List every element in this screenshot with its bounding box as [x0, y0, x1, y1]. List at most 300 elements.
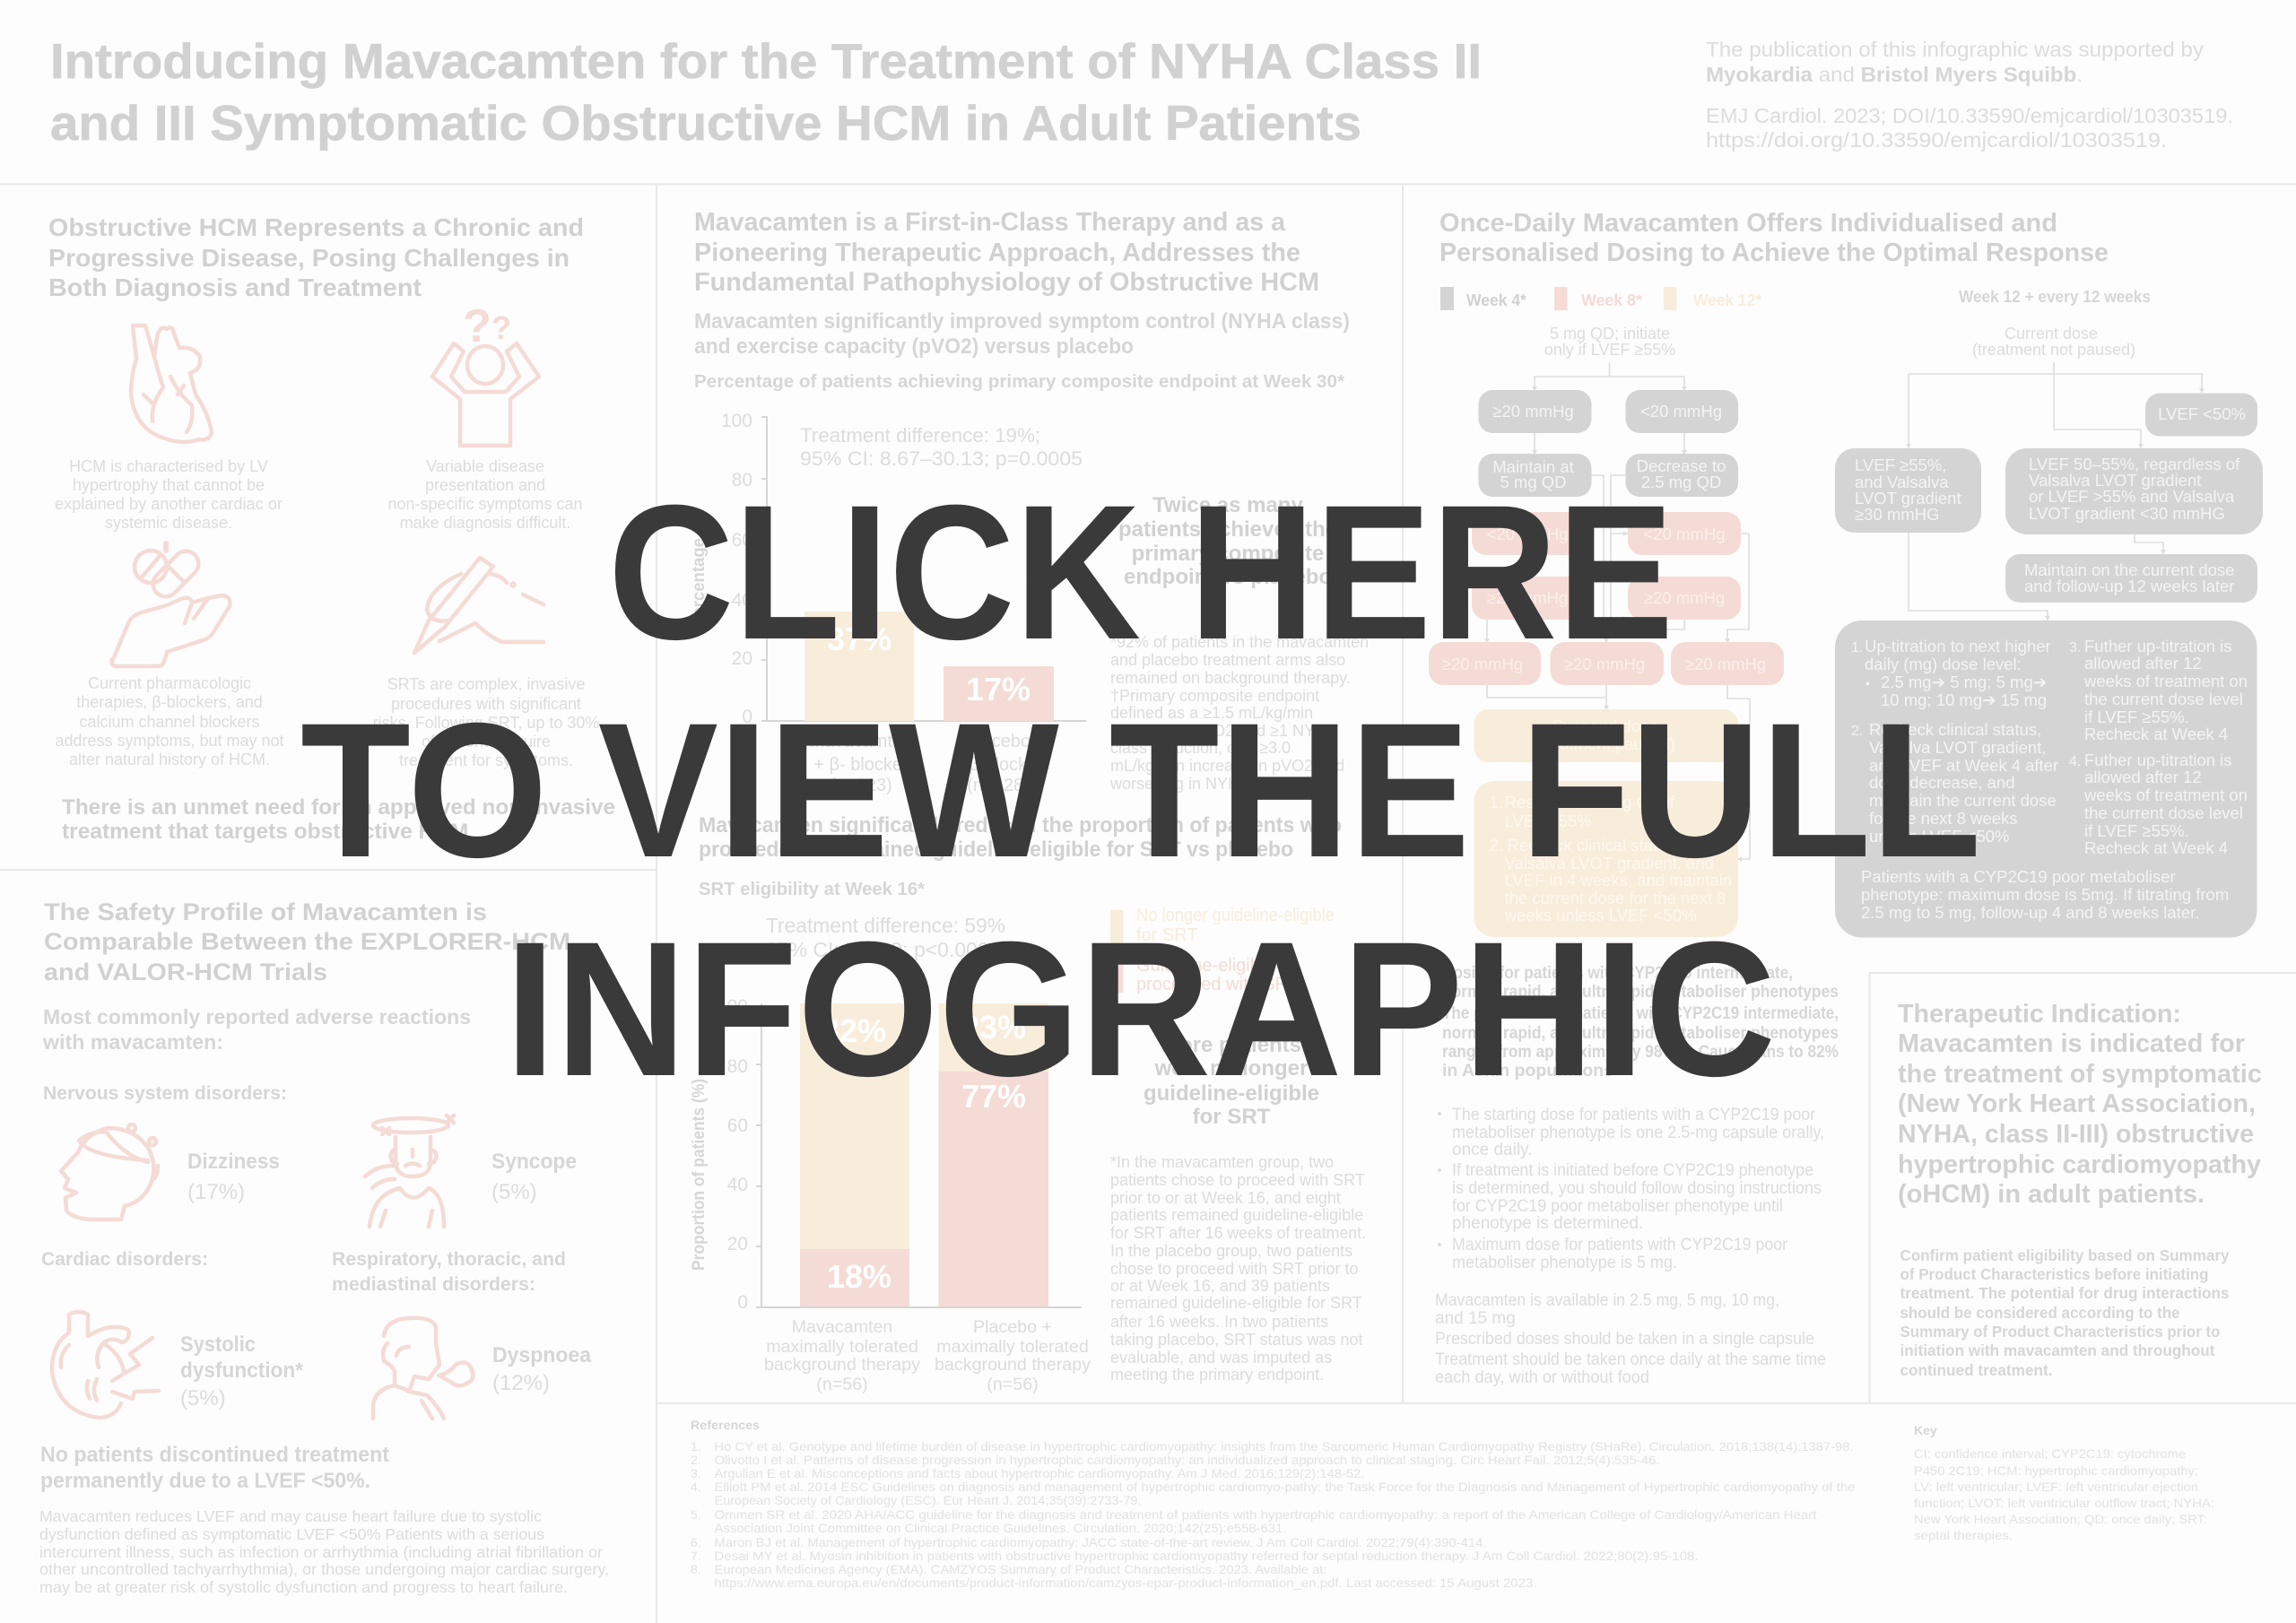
flow: up-titration box: unless LVEF <50%: [1869, 827, 2009, 846]
footnote: SRT: [1110, 1153, 1366, 1384]
callout: no longer eligible: guideline-eligible: [1144, 1081, 1319, 1106]
text: confirm eligibility: initiation with mavacamten and throughout: [1900, 1341, 2215, 1359]
legend: SRT eligibility: proceeded with SRT: [1136, 975, 1299, 994]
bar chart: primary composite endpoint: [690, 411, 1086, 795]
callout: twice as many: Twice as many: [1152, 493, 1303, 517]
callout: twice as many: [1118, 493, 1337, 589]
footnote: SRT: meeting the primary endpoint.: [1110, 1366, 1324, 1384]
bar chart: SRT eligibility: 100: [717, 996, 748, 1017]
flow: up-titration box: 2.5 mg to 5 mg, follow-up 4 and 8 weeks later.: [1861, 903, 2199, 922]
footnote: SRT: *In the mavacamten group, two: [1110, 1153, 1334, 1171]
text: SRTs: risks. Following SRT, up to 30%: [373, 714, 599, 732]
references: European Medicines Agency (EMA). CAMZYOS Summary of Product Characteristics. 2023. Available at:: [714, 1562, 1327, 1576]
bar chart: primary composite endpoint: + β-blocker: [953, 755, 1043, 775]
text: phenotype dosing: normal, rapid, and ultrarapid metaboliser phenotypes: [1442, 982, 1839, 1002]
callout: no longer eligible: were no longer: [1154, 1056, 1308, 1081]
list: poor metaboliser notes: Maximum dose for patients with CYP2C19 poor: [1452, 1236, 1788, 1254]
flow: up-titration box: weeks of treatment on: [2083, 672, 2248, 690]
text: dyspnoea: Dyspnoea: [492, 1343, 592, 1367]
flow: up-titration box: phenotype: maximum dose is 5mg. If titrating from: [1861, 885, 2229, 904]
flow: LVEF 50-55: LVOT gradient <30 mmHG: [2029, 504, 2225, 523]
heading: safety profile: Comparable Between the EXPLORER-HCM: [44, 928, 570, 955]
list: poor metaboliser notes: for CYP2C19 poor metaboliser phenotype until: [1452, 1197, 1783, 1216]
flow: up-titration box: daily (mg) dose level:: [1865, 655, 2022, 673]
panel: individualised dosing: [1429, 209, 2263, 1387]
heading: first-in-class: Pioneering Therapeutic Approach, Addresses the: [694, 239, 1300, 267]
overlay: click here call to action: CLICK HERE: [608, 465, 1674, 680]
list: poor metaboliser notes: If treatment is initiated before CYP2C19 phenotype: [1452, 1161, 1813, 1180]
bar chart: SRT eligibility: 95% CI: 50–69; p<0.0001: [766, 938, 1001, 961]
text: current pharmacologic therapies: address symptoms, but may not: [55, 732, 284, 750]
flow: LVEF 55 and gradient: LVOT gradient: [1855, 489, 1961, 508]
text: availability: Prescribed doses should be taken in a single capsule: [1435, 1330, 1814, 1349]
heading: therapeutic indication: Mavacamten is indicated for: [1898, 1029, 2245, 1058]
flow: week 8 boxes: <20 mmHg: [1643, 525, 1726, 543]
bar chart: primary composite endpoint: 20: [732, 648, 752, 669]
text: variable presentation: [387, 457, 583, 532]
text: syncope: (5%): [491, 1180, 537, 1204]
flow: week 4 boxes: 5 mg QD: [1500, 473, 1567, 491]
footnote: SRT: for SRT after 16 weeks of treatment.: [1110, 1224, 1366, 1242]
icon: dyspnoea: [373, 1318, 473, 1419]
flow: up-titration box: [1835, 621, 2257, 938]
legend: weeks: Week 4*: [1466, 291, 1526, 309]
subheading: symptom control: Mavacamten significantly improved symptom control (NYHA class): [694, 309, 1350, 334]
heading: disease challenges: Both Diagnosis and Treatment: [48, 273, 422, 301]
references: European Society of Cardiology (ESC). Eur Heart J. 2014;35(39):2733-79.: [714, 1493, 1141, 1507]
references: Elliott PM et al. 2014 ESC Guidelines on diagnosis and management of hypertrophic cardiomyo-pathy: the Task Force for the Diagnosis and Management of Hypertrophic cardiomyopathy of the: [714, 1480, 1856, 1494]
heading: first-in-class: Mavacamten is a First-in-Class Therapy and as a: [694, 208, 1286, 237]
text: systolic dysfunction: Systolic: [180, 1332, 256, 1357]
list: poor metaboliser notes: [1438, 1106, 1824, 1272]
bar chart: SRT eligibility: background therapy: [764, 1355, 920, 1375]
publication note: EMJ Cardiol. 2023; DOI/10.33590/emjcardiol/10303519.: [1706, 104, 2233, 127]
key: septal therapies.: [1914, 1528, 2013, 1542]
list: poor metaboliser notes: once daily.: [1452, 1141, 1532, 1159]
text: phenotype dosing: ranges from approximately 98% in Caucasians to 82%: [1442, 1042, 1839, 1062]
heading: therapeutic indication: (oHCM) in adult patients.: [1898, 1180, 2205, 1209]
text: heart failure warning: intercurrent illness, such as infection or arrhythmia (including atrial fibrillation or: [39, 1543, 603, 1561]
flow connectors: right: [1906, 362, 2205, 621]
heading: SRT reduction: proceeded or remained guideline-eligible for SRT vs placebo: [699, 838, 1293, 862]
footnote: primary endpoint: defined as a ≥1.5 mL/kg/min: [1110, 704, 1313, 722]
icon: syncope: [365, 1115, 454, 1227]
footnote: primary endpoint: [1109, 633, 1369, 793]
bar chart: primary composite endpoint: Treatment difference: 19%;: [800, 424, 1040, 447]
flow: up-titration box: allowed after 12: [2084, 654, 2202, 673]
key: CI: confidence interval; CYP2C19: cytochrome: [1914, 1446, 2186, 1461]
subheading: adverse reactions: with mavacamten:: [42, 1030, 223, 1054]
publication note: https://doi.org/10.33590/emjcardiol/10303519.: [1706, 128, 2167, 152]
icon: hand with scalpel: [414, 558, 544, 653]
text: SRTs: [373, 675, 599, 769]
footnote: SRT: evaluable, and was imputed as: [1110, 1349, 1332, 1367]
list: poor metaboliser notes: is determined, you should follow dosing instructions: [1452, 1179, 1822, 1198]
text: variable presentation: Variable disease: [426, 457, 544, 475]
icon: heart: [131, 325, 212, 442]
flow: up-titration box: for the next 8 weeks: [1869, 809, 2018, 828]
text: dyspnoea: [492, 1343, 592, 1395]
heading: dosing: Personalised Dosing to Achieve the Optimal Response: [1439, 239, 2109, 267]
text: HCM characterised: explained by another cardiac or: [55, 495, 283, 513]
callout: twice as many: primary composite: [1132, 542, 1324, 566]
legend: weeks: Week 12*: [1693, 291, 1761, 309]
references: [691, 1418, 1856, 1590]
flow: LVEF 55 and gradient: [1835, 448, 1981, 533]
flow: suspend dose: [1474, 709, 1738, 762]
flow: LVEF under 50: LVEF <50%: [2158, 404, 2246, 423]
references: 1.: [691, 1439, 701, 1454]
legend: weeks: [1440, 287, 1761, 310]
flow: up-titration box: 3.: [2069, 640, 2081, 655]
flow: up-titration box: Recheck at Week 4: [2084, 838, 2228, 857]
footnote: primary endpoint: *92% of patients in the mavacamten: [1110, 633, 1369, 651]
flow: up-titration box: the current dose level: [2084, 690, 2243, 708]
text: HCM characterised: [55, 457, 283, 532]
text: systolic dysfunction: dysfunction*: [180, 1358, 304, 1383]
flow: LVEF 55 and gradient: and Valsalva: [1855, 473, 1949, 491]
text: dyspnoea: (12%): [492, 1371, 550, 1395]
text: confirm eligibility: treatment. The potential for drug interactions: [1900, 1284, 2230, 1302]
text: current pharmacologic therapies: [55, 674, 284, 768]
bar chart: primary composite endpoint: Placebo: [966, 732, 1031, 751]
flow: restart instructions: LVEF ≥55%: [1505, 812, 1592, 830]
text: confirm eligibility: [1900, 1246, 2230, 1379]
references: References: [691, 1418, 760, 1432]
flow: LVEF 55 and gradient: LVEF ≥55%,: [1855, 456, 1946, 474]
label: cardiac disorders: Cardiac disorders:: [41, 1249, 208, 1270]
flow: up-titration box: allowed after 12: [2084, 768, 2202, 786]
text: availability: Mavacamten is available in 2.5 mg, 5 mg, 10 mg,: [1435, 1291, 1779, 1310]
text: dizziness: (17%): [187, 1180, 245, 1204]
subheading: adverse reactions: Most commonly reported adverse reactions: [43, 1005, 471, 1028]
text: current pharmacologic therapies: therapies, β-blockers, and: [76, 693, 263, 711]
flow: maintain current dose: and follow-up 12 weeks later: [2024, 577, 2234, 595]
heading: first-in-class: Fundamental Pathophysiology of Obstructive HCM: [694, 268, 1319, 297]
flow: maintain current dose: [2005, 554, 2257, 603]
text: heart failure warning: may be at greater risk of systolic dysfunction and progress to heart failure.: [39, 1578, 568, 1596]
label: respiratory disorders: [332, 1249, 566, 1295]
footnote: primary endpoint: and placebo treatment arms also: [1110, 651, 1345, 669]
bar chart: primary composite endpoint: 80: [732, 470, 752, 490]
text: phenotype dosing: normal, rapid, and ultrarapid metaboliser phenotypes: [1442, 1023, 1839, 1043]
publication note: The publication of this infographic was supported by: [1706, 38, 2205, 61]
label: week 12 onward: Week 12 + every 12 weeks: [1959, 288, 2151, 306]
text: current pharmacologic therapies: alter natural history of HCM.: [69, 751, 270, 768]
references: Ommen SR et al. 2020 AHA/ACC guideline for the diagnosis and treatment of patients with hypertrophic cardiomyopathy: a report of the American College of Cardiology/American Heart: [714, 1507, 1817, 1522]
panel: obstructive HCM disease: [48, 213, 615, 844]
bar chart: SRT eligibility: background therapy: [935, 1355, 1091, 1375]
footnote: SRT: prior to or at Week 16, and eight: [1110, 1189, 1341, 1207]
text: syncope: Syncope: [491, 1150, 577, 1174]
heading: safety profile: The Safety Profile of Mavacamten is: [44, 898, 487, 925]
bar chart: primary composite endpoint: 60: [732, 530, 752, 551]
heading: SRT reduction: Mavacamten significantly reduced the proportion of patients who: [699, 813, 1342, 838]
flow: up-titration box: if LVEF ≥55%.: [2084, 707, 2189, 726]
bar chart: SRT eligibility: 23%: [961, 1009, 1026, 1046]
key: [1914, 1423, 2214, 1542]
text: availability: [1435, 1291, 1826, 1387]
list: poor metaboliser notes: phenotype is determined.: [1452, 1214, 1643, 1233]
flow: week 4 boxes: Maintain at: [1492, 457, 1574, 476]
references: 8.: [691, 1562, 701, 1576]
bar chart: primary composite endpoint: Mavacamten: [810, 732, 912, 751]
subheading: symptom control: and exercise capacity (pVO2) versus placebo: [694, 334, 1134, 359]
text: dizziness: [187, 1150, 280, 1204]
bar chart: SRT eligibility: Proportion of patients (%): [690, 1079, 709, 1271]
bar chart: primary composite endpoint: + β- blocker: [813, 755, 909, 775]
callout: no discontinuation: permanently due to a LVEF <50%.: [40, 1469, 370, 1493]
bar chart: SRT eligibility: 18%: [827, 1258, 891, 1295]
flow: up-titration box: Recheck clinical status,: [1869, 720, 2041, 739]
flow: restart instructions: the current dose for the next 8: [1505, 889, 1726, 907]
overlay: click here call to action: [300, 465, 1981, 1116]
text: phenotype dosing: Dosing for patients with CYP2C19 intermediate,: [1442, 963, 1793, 983]
bar chart: SRT eligibility: 80: [727, 1056, 748, 1077]
bar chart: SRT eligibility: (n=56): [987, 1375, 1039, 1394]
footnote: SRT: patients chose to proceed with SRT: [1110, 1171, 1365, 1189]
legend: weeks: Week 8*: [1581, 291, 1642, 309]
flow: up-titration box: 2.5 mg➔ 5 mg; 5 mg➔: [1881, 673, 2047, 691]
subheading: adverse reactions: [42, 1005, 471, 1054]
heading: therapeutic indication: NYHA, class II-III) obstructive: [1898, 1120, 2254, 1149]
text: starting dose: 5 mg QD; initiate: [1550, 325, 1670, 343]
bar chart: primary composite endpoint: (n=128): [967, 776, 1030, 795]
heading: disease challenges: [48, 213, 584, 301]
text: variable presentation: make diagnosis difficult.: [400, 514, 570, 532]
footnote: primary endpoint: remained on background therapy.: [1110, 669, 1351, 687]
flow: LVEF 55 and gradient: ≥30 mmHG: [1855, 505, 1939, 524]
chart title: SRT eligibility: SRT eligibility at Week 16*: [699, 880, 925, 899]
bar chart: SRT eligibility: 60: [727, 1115, 748, 1136]
bar chart: SRT eligibility: (n=56): [816, 1375, 868, 1394]
flow: up-titration box: Futher up-titration is: [2084, 751, 2232, 769]
footnote: SRT: In the placebo group, two patients: [1110, 1242, 1352, 1260]
text: SRTs: of patients require: [422, 733, 551, 751]
flow: week 8 boxes: ≥20 mmHg: [1564, 655, 1645, 673]
flow: restart instructions: 1.: [1489, 793, 1503, 812]
references: 4.: [691, 1480, 701, 1494]
panel: therapeutic indication: [1898, 1000, 2262, 1379]
text: confirm eligibility: continued treatment.: [1900, 1361, 2052, 1379]
references: 6.: [691, 1535, 701, 1549]
flow: up-titration box: Valsalva LVOT gradient,: [1869, 738, 2046, 757]
text: HCM characterised: HCM is characterised by LV: [69, 457, 268, 475]
label: respiratory disorders: mediastinal disorders:: [332, 1274, 535, 1295]
key: P450 2C19; HCM: hypertrophic cardiomyopathy;: [1914, 1463, 2198, 1478]
text: variable presentation: presentation and: [425, 476, 545, 494]
key: LV: left ventricular; LVEF: left ventricular ejection: [1914, 1480, 2198, 1494]
references: Association Joint Committee on Clinical Practice Guidelines. Circulation. 2020;142(25):e558-631.: [714, 1521, 1286, 1535]
references: Maron BJ et al. Management of hypertrophic cardiomyopathy: JACC state-of-the-art review. J Am Coll Cardiol. 2022;79(4):390-414.: [714, 1535, 1487, 1549]
flow: up-titration box: 10 mg; 10 mg➔ 15 mg: [1881, 690, 2047, 709]
key: Key: [1914, 1423, 1937, 1437]
icon: confused person: [432, 300, 539, 446]
icon: confused person: ?: [463, 300, 491, 352]
text: availability: each day, with or without food: [1435, 1368, 1649, 1387]
icon: pills over hand: [112, 543, 230, 666]
references: https://www.ema.europa.eu/en/documents/product-information/camzyos-epar-product-information_en.pdf. Last accessed: 15 August 2023.: [714, 1575, 1537, 1590]
flow: week 8 boxes: ≥20 mmHg: [1685, 655, 1766, 673]
flow: restart instructions: weeks unless LVEF <50%: [1503, 906, 1697, 924]
text: phenotype dosing: in Asian populations: [1442, 1061, 1613, 1081]
footnote: SRT: remained guideline-eligible for SRT: [1110, 1294, 1362, 1312]
flow: up-titration box: 4.: [2069, 754, 2081, 769]
bar chart: SRT eligibility: maximally tolerated: [936, 1337, 1089, 1357]
icon: dizziness: [61, 1124, 158, 1219]
text: variable presentation: non-specific symptoms can: [387, 495, 583, 513]
list: poor metaboliser notes: The starting dose for patients with a CYP2C19 poor: [1452, 1106, 1816, 1124]
flow: week 4 boxes: 2.5 mg QD: [1641, 473, 1721, 491]
text: current dose: Current dose: [2005, 325, 2098, 343]
text: SRTs: procedures with significant: [391, 695, 581, 713]
heading: SRT reduction: [699, 813, 1342, 862]
flow: LVEF 50-55: or LVEF >55% and Valsalva: [2029, 487, 2235, 506]
heading: dosing: Once-Daily Mavacamten Offers Individualised and: [1439, 209, 2057, 238]
flow: week 4 boxes: <20 mmHg: [1640, 402, 1722, 421]
title: and III Symptomatic Obstructive HCM in Adult Patients: [50, 95, 1361, 151]
heading: disease challenges: Obstructive HCM Represents a Chronic and: [48, 213, 584, 241]
title: Introducing Mavacamten for the Treatment of NYHA Class II: [50, 33, 1482, 89]
text: heart failure warning: dysfunction defined as symptomatic LVEF <50% Patients with a serious: [39, 1525, 544, 1543]
footnote: primary endpoint: worsening in NYHA class.: [1109, 775, 1295, 793]
overlay: click here call to action: TO VIEW THE FULL: [300, 683, 1981, 898]
flow: up-titration box: the current dose level: [2084, 803, 2243, 822]
footnote: SRT: taking placebo, SRT status was not: [1110, 1331, 1363, 1349]
title: [50, 33, 1482, 151]
text: heart failure warning: other uncontrolled tachyarrhythmia), or those undergoing major cardiac surgery,: [39, 1560, 609, 1578]
bar chart: primary composite endpoint: 17%: [966, 671, 1031, 707]
text: confirm eligibility: Confirm patient eligibility based on Summary: [1900, 1246, 2230, 1264]
flow: LVEF 50-55: [2005, 448, 2263, 534]
text: starting dose: only if LVEF ≥55%: [1544, 341, 1675, 359]
heading: therapeutic indication: (New York Heart Association,: [1898, 1089, 2256, 1118]
bar chart: primary composite endpoint: (n=123): [830, 776, 892, 795]
legend: SRT eligibility: No longer guideline-eligible: [1136, 906, 1335, 925]
text: current pharmacologic therapies: Current pharmacologic: [88, 674, 251, 692]
flow: week 4 boxes: ≥20 mmHg: [1492, 402, 1574, 421]
footnote: SRT: after 16 weeks. In two patients: [1110, 1313, 1328, 1331]
flow: restart instructions: [1474, 781, 1738, 937]
text: current pharmacologic therapies: calcium channel blockers: [79, 713, 260, 731]
flow: up-titration box: if LVEF ≥55%.: [2084, 821, 2189, 840]
bar chart: primary composite endpoint: 37%: [827, 621, 891, 657]
panel: safety profile: [39, 898, 609, 1596]
heading: dosing: [1439, 209, 2109, 267]
text: confirm eligibility: Summary of Product Characteristics prior to: [1900, 1323, 2221, 1341]
flow: restart instructions: LVEF in 4 weeks, and maintain: [1505, 871, 1732, 890]
flow: restart instructions: Recheck clinical status,: [1507, 836, 1680, 855]
text: current dose: (treatment not paused): [1972, 341, 2135, 359]
heading: therapeutic indication: the treatment of symptomatic: [1898, 1060, 2262, 1089]
flow connectors: left: [1484, 362, 1750, 862]
flow: restart instructions: Restart at 2.5 mg QD if: [1505, 793, 1675, 812]
callout: unmet need: There is an unmet need for an approved non-invasive: [62, 795, 615, 820]
flow: week 8 boxes: ≥20 mmHg: [1487, 588, 1568, 607]
bar chart: primary composite endpoint: 100: [721, 411, 752, 431]
heading: safety profile: [44, 898, 570, 985]
text: phenotype dosing: [1442, 963, 1839, 1081]
heading: therapeutic indication: Therapeutic Indication:: [1898, 1000, 2181, 1028]
label: respiratory disorders: Respiratory, thoracic, and: [332, 1249, 566, 1270]
text: HCM characterised: hypertrophy that cannot be: [73, 476, 265, 494]
flow: restart instructions: 2.: [1489, 836, 1503, 855]
flow: up-titration box: and LVEF at Week 4 after: [1869, 756, 2058, 775]
legend: SRT eligibility: Guideline-eligible or: [1136, 956, 1295, 976]
footnote: SRT: chose to proceed with SRT prior to: [1110, 1260, 1358, 1278]
key: New York Heart Association; QD: once daily; SRT:: [1914, 1512, 2207, 1526]
bar chart: SRT eligibility: 20: [727, 1234, 748, 1254]
bar chart: SRT eligibility: [690, 914, 1091, 1394]
text: confirm eligibility: should be considered according to the: [1900, 1304, 2180, 1322]
publication note: Myokardia and Bristol Myers Squibb .: [1706, 63, 2083, 86]
text: HCM characterised: systemic disease.: [105, 514, 232, 532]
footnote: SRT: patients remained guideline-eligible: [1110, 1206, 1363, 1224]
callout: unmet need: [62, 795, 615, 844]
flow: LVEF 50-55: Valsalva LVOT gradient: [2029, 471, 2201, 490]
text: systolic dysfunction: (5%): [180, 1386, 226, 1410]
list: poor metaboliser notes: metaboliser phenotype is 5 mg.: [1452, 1254, 1677, 1272]
callout: twice as many: endpoint vs placebo: [1124, 565, 1332, 589]
bar chart: SRT eligibility: 40: [727, 1175, 748, 1195]
bar chart: primary composite endpoint: 40: [732, 590, 752, 611]
references: 3.: [691, 1466, 701, 1480]
callout: no longer eligible: [1144, 1033, 1319, 1129]
heading: therapeutic indication: hypertrophic cardiomyopathy: [1898, 1150, 2261, 1179]
flow: up-titration box: maintain the current dose: [1869, 791, 2057, 810]
callout: no discontinuation: No patients discontinued treatment: [40, 1443, 389, 1467]
flow: LVEF 50-55: LVEF 50–55%, regardless of: [2029, 455, 2240, 473]
bar chart: SRT eligibility: 77%: [961, 1078, 1026, 1115]
flow: suspend dose: Suspend dose: [1552, 716, 1658, 735]
footnote: primary endpoint: class reduction, or a ≥3.0: [1110, 739, 1291, 757]
chart title: primary endpoint: Percentage of patients achieving primary composite endpoint at Week 30*: [694, 372, 1344, 392]
text: confirm eligibility: of Product Characteristics before initiating: [1900, 1265, 2208, 1283]
flow: up-titration box: •: [1866, 676, 1870, 690]
flow: up-titration box: weeks of treatment on: [2083, 785, 2248, 804]
text: syncope: [491, 1150, 577, 1204]
bar chart: SRT eligibility: Mavacamten: [792, 1317, 892, 1337]
key: function; LVOT: left ventricular outflow tract; NYHA:: [1914, 1496, 2214, 1510]
icon: systolic heart: [52, 1312, 159, 1418]
text: current dose: [1972, 325, 2135, 359]
footnote: primary endpoint: increase in pVO2 and ≥1 NYHA: [1110, 722, 1337, 740]
callout: no longer eligible: for SRT: [1193, 1105, 1271, 1129]
text: SRTs: treatment for symptoms.: [399, 751, 573, 769]
callout: no longer eligible: More patients: [1161, 1033, 1301, 1057]
text: heart failure warning: [39, 1507, 609, 1596]
text: SRTs: SRTs are complex, invasive: [387, 675, 585, 693]
text: dizziness: Dizziness: [187, 1150, 280, 1174]
flow: restart instructions: Valsalva LVOT gradient, and: [1505, 854, 1714, 872]
flow: maintain current dose: Maintain on the current dose: [2024, 560, 2234, 579]
text: availability: Treatment should be taken once daily at the same time: [1435, 1350, 1826, 1369]
text: availability: and 15 mg: [1435, 1309, 1516, 1328]
flow: up-titration box: 1.: [1851, 640, 1863, 655]
callout: twice as many: patients achieved the: [1118, 517, 1337, 542]
references: 2.: [691, 1453, 701, 1467]
bar chart: SRT eligibility: Treatment difference: 59%: [766, 914, 1005, 937]
text: heart failure warning: Mavacamten reduces LVEF and may cause heart failure due to systolic: [39, 1507, 542, 1525]
bar chart: SRT eligibility: maximally tolerated: [766, 1337, 918, 1357]
references: 5.: [691, 1507, 701, 1522]
flow: up-titration box: dose decrease, and: [1869, 773, 2015, 792]
flow: week 8 boxes: <20 mmHg: [1487, 525, 1568, 543]
overlay: click here call to action: INFOGRAPHIC: [505, 902, 1776, 1116]
panel: first-in-class therapy: [690, 208, 1369, 1394]
flow: up-titration box: Up-titration to next higher: [1865, 637, 2051, 655]
flow: up-titration box: Recheck at Week 4: [2084, 725, 2228, 743]
